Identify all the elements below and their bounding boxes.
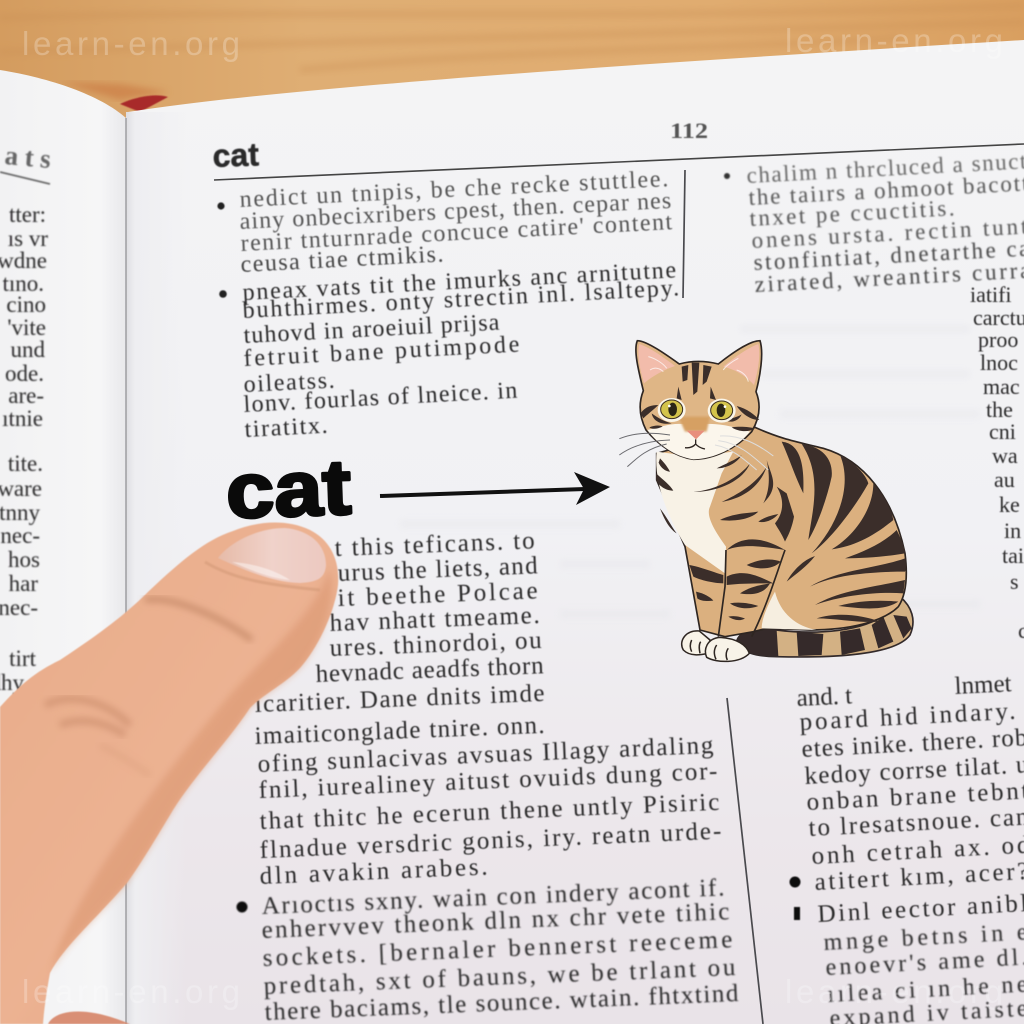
left column upper entry text: pneax vats tit the imurks anc arnitutne (242, 257, 677, 306)
arrow from word to cat (380, 472, 610, 505)
middle column bullet entry text (236, 874, 739, 1024)
page header: cat: cat (212, 136, 260, 174)
right column lower text: poard hid indary. (799, 698, 1016, 736)
gutter shading (126, 112, 186, 1024)
far right partial text column: wa (992, 443, 1018, 468)
left column upper entry text: oileatss. (243, 368, 335, 398)
cat paws (682, 631, 749, 661)
cat tail (737, 597, 913, 657)
cat head (619, 341, 773, 470)
middle column lower entry text: that thitc he ecerun thene untly Pisiric (259, 789, 720, 835)
far right partial text column: proo (978, 327, 1018, 352)
header rule (214, 144, 1024, 180)
left column upper entry text: fetruit bane putimpode (243, 332, 520, 372)
middle column lower entry text: icaritier. Dane dnits imde (254, 680, 545, 718)
middle column lower entry text: urus the liets, and (337, 552, 539, 587)
right column upper entry text: onens ursta. rectin tunt (751, 214, 1024, 253)
far right partial text column: mac (983, 374, 1020, 399)
right column upper entry text (724, 148, 1024, 297)
left column upper entry text: ainy onbecixribers cpest, then. cepar nes (239, 188, 672, 235)
fingernail (218, 528, 326, 583)
middle column bullet entry text: sockets. [bernaler bennerst reeceme (262, 926, 733, 972)
far right partial text column: lnoc (980, 350, 1018, 375)
cat illustration (619, 341, 913, 661)
left column upper entry text: ceusa tiae ctmikis. (240, 241, 444, 278)
middle column bullet entry text: Arıoctıs sxny. wain con indery acont if. (261, 874, 725, 920)
far right partial text column: the (986, 397, 1013, 422)
far right partial text column: in (1004, 518, 1021, 543)
middle column lower entry text: t this teficans. to (334, 527, 535, 562)
left page text column: tter: (9, 202, 46, 227)
right column lower text: etes inike. there. rob (801, 724, 1024, 763)
left page text column: tnny (0, 500, 40, 525)
left page text column: ıs vr (8, 226, 48, 251)
cat eyes (658, 398, 736, 423)
right column lower text: onh cetrah ax. od (811, 832, 1024, 870)
right column lower text (790, 670, 1024, 928)
right column upper entry text: the taiırs a ohmoot bacott (748, 170, 1024, 210)
right column lower text: and. t (796, 682, 853, 712)
left column upper entry text: nedict un tnipis, be che recke stuttlee. (239, 166, 669, 213)
left column upper entry text: lonv. fourlas of lneice. in (243, 378, 518, 418)
cat nose and mouth (687, 431, 705, 439)
left page text column: und (10, 337, 46, 362)
left page text column: are- (8, 383, 44, 408)
right column lower text: onban brane tebnt (806, 777, 1024, 816)
left page text column: cino (6, 292, 46, 317)
right column bottom blurred text (823, 919, 1024, 1024)
right column lower text: Dinl eector anibl (817, 890, 1024, 928)
finger shading (50, 570, 332, 973)
second finger hint at bottom (48, 1012, 130, 1024)
left column upper entry text: renir tnturnrade concuce catire' content (240, 209, 673, 257)
far right partial text column: s (1010, 569, 1019, 594)
middle column lower entry text: imaiticonglade tnire. onn. (254, 712, 545, 750)
right column bottom blurred text: ıılea ci ın he ne (827, 972, 1024, 1008)
middle column lower entry text: dln avakin arabes. (259, 853, 488, 890)
page number: 112 (670, 118, 708, 143)
right column lower text: lnmet (954, 670, 1012, 700)
cat body (657, 427, 906, 637)
left page text column (0, 140, 52, 695)
middle column lower entry text: hav nhatt tmeame. (329, 602, 540, 637)
left page text column: hos (8, 547, 40, 572)
middle column lower entry text (254, 527, 722, 890)
left page text column: nec- (0, 523, 40, 548)
body stripes (656, 442, 906, 622)
left page text column: tıno. (2, 271, 44, 296)
watermarks: learn-en.org: learn-en.org (785, 22, 1003, 59)
middle column lower entry text: flnadue versdric gonis, iry. reatn urde- (259, 818, 722, 864)
far right partial text column: au (994, 467, 1015, 492)
watermarks: learn-en.org: learn-en.org (22, 973, 240, 1010)
left column upper entry text: buhthirmes. onty strectin inl. lsaltepy. (242, 275, 680, 324)
middle column lower entry text: fnil, iurealiney aitust ovuids dung cor- (258, 758, 718, 804)
knuckle creases (45, 699, 130, 735)
nail fold crease (145, 599, 252, 640)
left page text column: ats (4, 140, 52, 174)
faint ghost text behind cat (400, 325, 980, 618)
head stripes (641, 363, 759, 431)
finger pointing at the word (0, 523, 338, 1024)
watermarks: learn-en.org: learn-en.org (22, 25, 240, 62)
far right partial text column: cni (989, 419, 1016, 444)
far right partial text column: ke (999, 492, 1020, 517)
middle column bullet entry text: enhervvev theonk dln nx chr vete tihic (261, 898, 730, 944)
white belly patch (762, 592, 817, 630)
right column bottom blurred text: enoevr's ame dl. (825, 944, 1024, 981)
right column lower text: kedoy corrse tilat. u (804, 751, 1024, 790)
watermarks: learn-en.org: learn-en.org (785, 973, 1003, 1010)
right column lower text: atitert kım, acer? (814, 858, 1024, 896)
headword: cat: cat (225, 443, 353, 535)
middle column lower entry text: it beethe Polcae (337, 577, 538, 612)
right column upper entry text: chalim n thrcluced a snuct (746, 148, 1024, 188)
left page text column: har (9, 571, 38, 596)
right column upper entry text: tnxet pe ccuctitis. (749, 195, 955, 231)
left column upper entry text: tuhovd in aroeiuil prijsa (243, 310, 500, 349)
far right partial text column: tai (1002, 543, 1024, 568)
left column upper entry text (217, 166, 680, 443)
left page text column: tirt (9, 646, 37, 671)
left page (0, 70, 126, 1024)
column divider rules (683, 170, 763, 1024)
left page text column: 'vite (7, 315, 46, 340)
right column upper entry text: stonfintiat, dnetarthe ca (753, 236, 1024, 275)
left page text column: ıtnie (2, 406, 43, 431)
whiskers (619, 433, 773, 470)
middle column lower entry text: ofing sunlacivas avsuas Illagy ardaling (257, 732, 714, 778)
left column upper entry text: tiratitx. (244, 413, 328, 443)
inner ears (638, 344, 675, 383)
middle column lower entry text: ures. thinordoi, ou (329, 627, 543, 662)
red book cover edge (120, 95, 168, 112)
right column lower text: to lresatsnoue. can (808, 803, 1024, 842)
far right partial text column: iatifi (970, 282, 1012, 307)
right column upper entry text: zirated, wreantirs curra (754, 258, 1024, 297)
white chest fur (656, 452, 733, 573)
left page text column: tite. (8, 451, 43, 476)
middle column lower entry text: hevnadc aeadfs thorn (315, 652, 545, 688)
far right partial text column (970, 282, 1024, 643)
front leg lines (718, 550, 785, 637)
right column bottom blurred text: mnge betns in e (823, 919, 1024, 956)
middle column bullet entry text: predtah, sxt of bauns, we be trlant ou (263, 954, 736, 1000)
white muzzle (647, 424, 750, 459)
left page text column: ode. (5, 361, 44, 386)
